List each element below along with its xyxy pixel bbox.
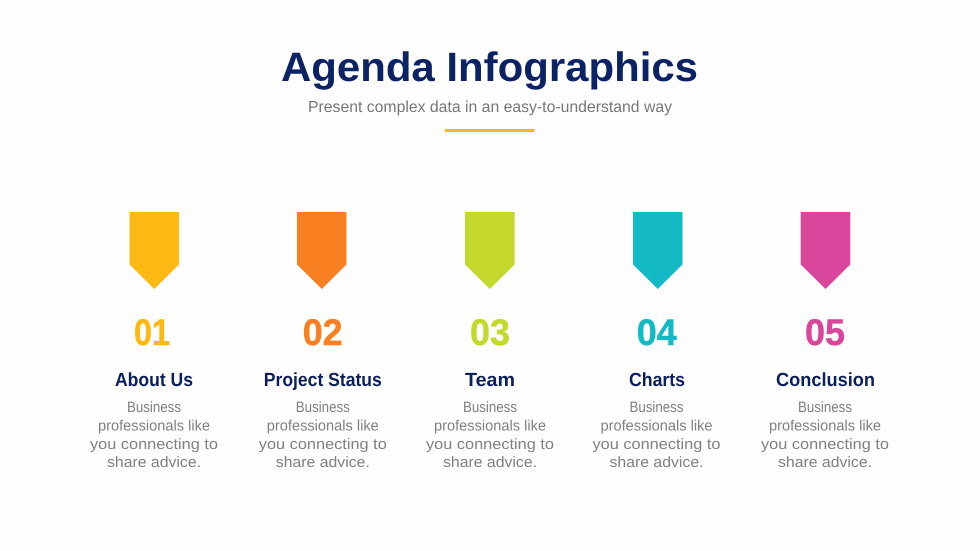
title: Agenda Infographics [281, 44, 698, 90]
body text: team: you connecting to [426, 436, 554, 453]
body text: project status: you connecting to [259, 436, 387, 453]
number 03: 03 [470, 312, 510, 353]
number 01: 01 [134, 312, 170, 353]
icon: magenta arrow tag [801, 212, 850, 289]
body text: project status: Business [296, 399, 350, 416]
icon: yellow arrow tag [130, 212, 179, 289]
body text: about us: you connecting to [90, 436, 218, 453]
body text: conclusion: you connecting to [761, 436, 889, 453]
panel: project status [259, 212, 387, 471]
body text: charts: you connecting to [592, 436, 720, 453]
heading: project status: Project Status [264, 370, 382, 391]
body text: about us: share advice. [107, 454, 201, 471]
number 04: 04 [637, 312, 677, 353]
panel: charts [592, 212, 720, 471]
heading: charts: Charts [629, 370, 685, 391]
panel: about us [90, 212, 218, 471]
body text: charts: Business [630, 399, 684, 416]
body text: about us: Business [127, 399, 181, 416]
number 02: 02 [303, 312, 343, 353]
body text: project status [259, 399, 387, 471]
title accent bar [445, 129, 534, 132]
body text: project status: share advice. [276, 454, 370, 471]
body text: project status: professionals like [267, 418, 379, 434]
panel: team [426, 212, 554, 471]
icon: teal arrow tag [633, 212, 682, 289]
body text: team [426, 399, 554, 471]
number 05: 05 [805, 312, 845, 353]
body text: conclusion: Business [798, 399, 852, 416]
body text: charts [592, 399, 720, 471]
panel: conclusion [761, 212, 889, 471]
heading: about us: About Us [115, 370, 193, 391]
heading: team: Team [465, 370, 515, 391]
body text: team: Business [463, 399, 517, 416]
icon: lime arrow tag [465, 212, 515, 289]
body text: about us: professionals like [98, 418, 210, 434]
subtitle: Present complex data in an easy-to-understand way [308, 99, 672, 116]
body text: team: share advice. [443, 454, 537, 471]
icon: orange arrow tag [297, 212, 346, 289]
body text: conclusion: professionals like [769, 418, 881, 434]
body text: team: professionals like [434, 418, 546, 434]
body text: charts: share advice. [610, 454, 704, 471]
body text: conclusion [761, 399, 889, 471]
body text: about us [90, 399, 218, 471]
body text: conclusion: share advice. [778, 454, 872, 471]
heading: conclusion: Conclusion [776, 370, 875, 391]
body text: charts: professionals like [600, 418, 712, 434]
